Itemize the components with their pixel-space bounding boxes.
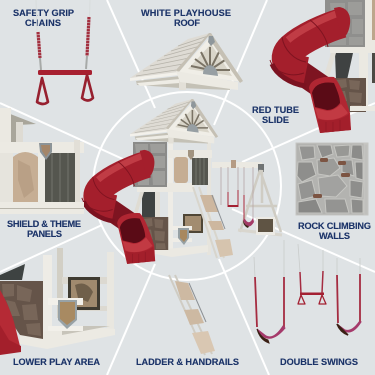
illustration: central playset — [82, 99, 282, 264]
illustration: white playhouse roof — [130, 33, 243, 90]
illustration: rock climbing wall — [296, 143, 368, 215]
heading: shield and theme panels: PANELS — [27, 229, 62, 239]
heading: red tube slide: RED TUBE — [252, 105, 299, 115]
heading: shield and theme panels — [7, 219, 81, 239]
climbing holds — [313, 158, 350, 198]
center: lower brown rock wall — [142, 217, 168, 250]
center: tube slide — [82, 150, 155, 264]
heading: red tube slide: SLIDE — [262, 115, 289, 125]
center: tower posts and platform — [133, 128, 212, 257]
heading: white playhouse roof: WHITE PLAYHOUSE — [141, 8, 231, 18]
heading: safety grip chains: SAFETY GRIP — [13, 8, 74, 18]
heading: double swings: DOUBLE SWINGS — [280, 357, 358, 367]
heading: lower play area: LOWER PLAY AREA — [13, 357, 100, 367]
center: rock wall panel — [133, 142, 167, 187]
heading: rock climbing walls: ROCK CLIMBING — [298, 221, 371, 231]
heading: white playhouse roof: ROOF — [174, 18, 200, 28]
heading: ladder and handrails: LADDER & HANDRAILS — [136, 357, 239, 367]
illustration: red tube slide with tower — [270, 0, 375, 133]
icon: safety grip chains trapeze — [36, 0, 93, 104]
heading: white playhouse roof — [141, 8, 231, 28]
heading: rock climbing walls — [298, 221, 371, 241]
center: swing set frame — [212, 160, 282, 235]
center: ladder — [193, 187, 233, 258]
illustration: shield and theme panels — [0, 108, 84, 214]
heading: shield and theme panels: SHIELD & THEME — [7, 219, 81, 229]
heading: safety grip chains — [13, 8, 74, 28]
illustration: lower play area — [0, 248, 115, 355]
illustration: ladder and handrails — [169, 275, 215, 355]
heading: rock climbing walls: WALLS — [319, 231, 350, 241]
heading: safety grip chains: CHAINS — [25, 18, 61, 28]
center: roof — [130, 99, 218, 144]
illustration: double swings — [254, 240, 361, 343]
heading: red tube slide — [252, 105, 299, 125]
